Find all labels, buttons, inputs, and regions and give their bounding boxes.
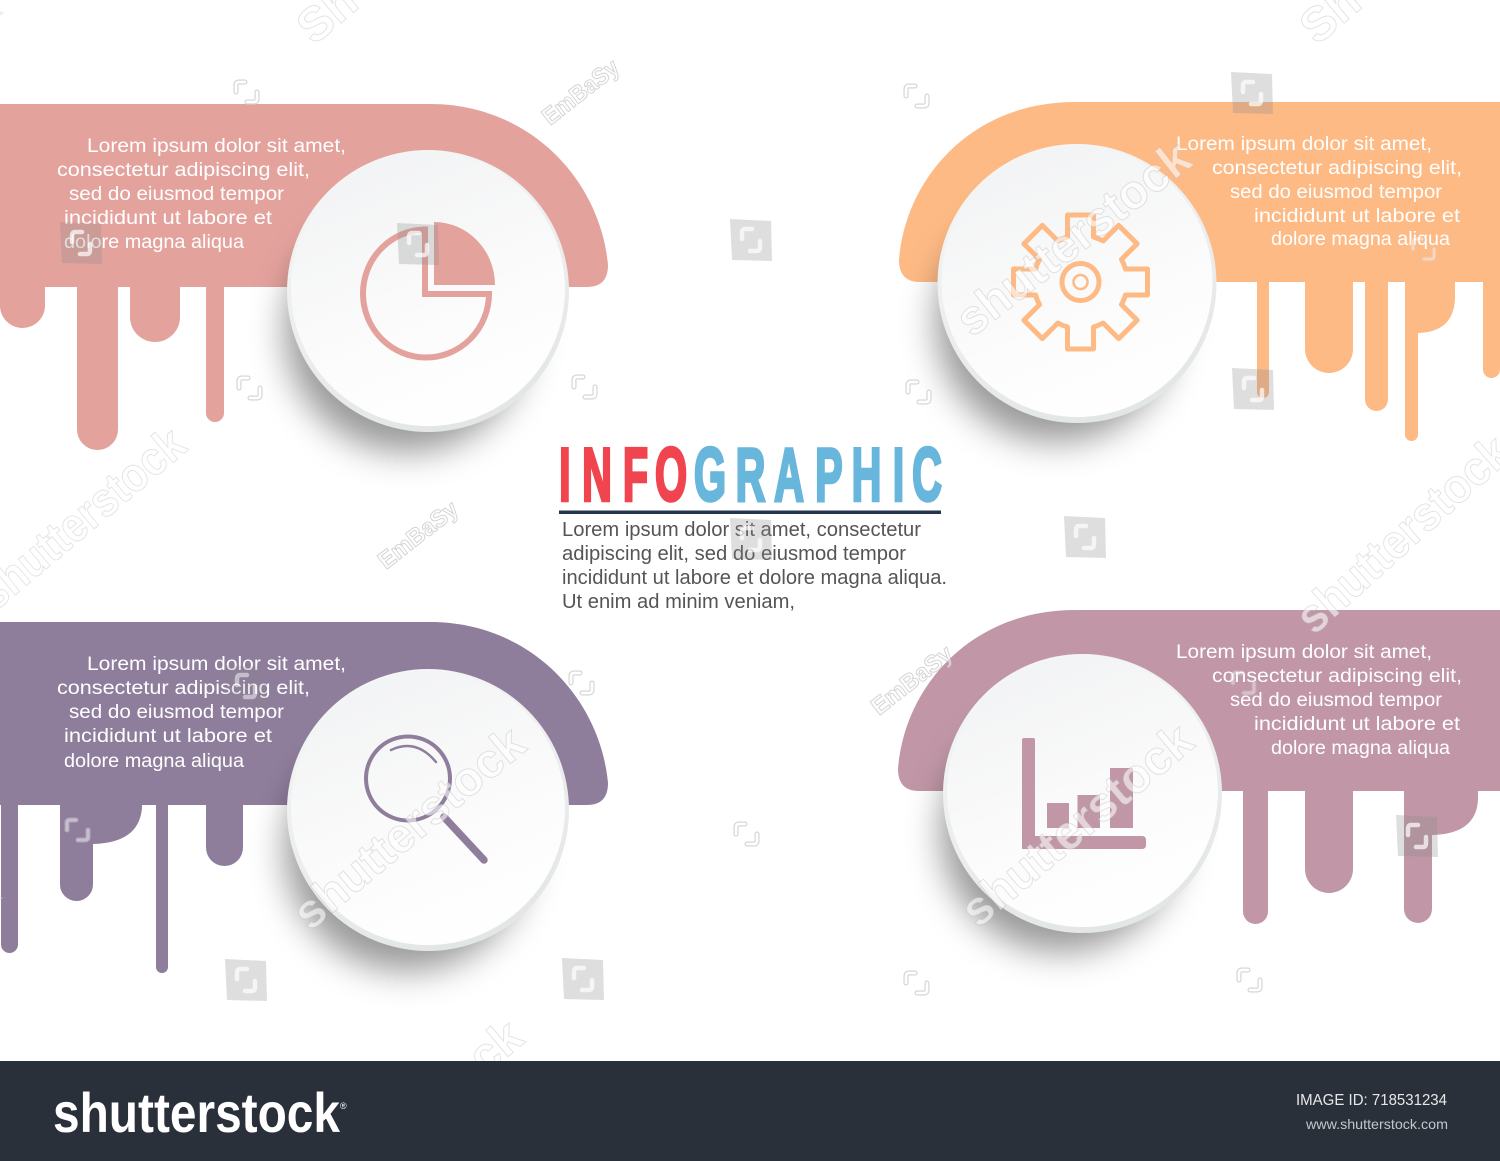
intro paragraph [562, 519, 947, 613]
orange circle badge [936, 144, 1216, 442]
purple panel text [57, 654, 346, 772]
watermarks: EmBaSy [373, 495, 464, 575]
website: www.shutterstock.com [1305, 1116, 1448, 1132]
watermarks: shutterstock [946, 131, 1201, 347]
heading: INFOGRAPHIC: I [559, 432, 571, 517]
purple circle badge [285, 669, 569, 971]
purple panel text: incididunt ut labore et [64, 726, 273, 747]
mauve panel text: dolore magna aliqua [1271, 738, 1450, 759]
watermarks: EmBaSy [537, 54, 625, 131]
footer logo: shutterstock [53, 1081, 341, 1144]
icon: bar chart [1022, 738, 1146, 849]
intro paragraph: incididunt ut labore et dolore magna aliqua. [562, 567, 947, 589]
title block [559, 432, 947, 613]
mauve panel text: sed do eiusmod tempor [1230, 690, 1443, 711]
purple panel text: Lorem ipsum dolor sit amet, [87, 654, 346, 675]
watermarks: shutterstock [951, 713, 1204, 937]
pink panel text: incididunt ut labore et [64, 208, 273, 229]
orange panel text [1176, 134, 1462, 250]
panel: bottom-right mauve [898, 610, 1500, 952]
watermarks: ck [458, 1009, 533, 1084]
orange panel text: sed do eiusmod tempor [1230, 182, 1443, 203]
orange band with drips [899, 102, 1500, 441]
heading: INFOGRAPHIC: P [815, 432, 843, 517]
image id: IMAGE ID: 718531234 [1296, 1092, 1447, 1109]
heading: INFOGRAPHIC: G [694, 432, 726, 517]
panel: top-left pink [0, 104, 608, 452]
pink panel text: dolore magna aliqua [64, 232, 244, 253]
pink panel text [57, 136, 346, 253]
pink band with drips [0, 104, 608, 450]
intro paragraph: Ut enim ad minim veniam, [562, 591, 795, 613]
orange panel text: dolore magna aliqua [1271, 229, 1450, 250]
intro paragraph: Lorem ipsum dolor sit amet, consectetur [562, 519, 921, 541]
mauve band with drips [898, 610, 1500, 924]
intro paragraph: adipiscing elit, sed do eiusmod tempor [562, 543, 906, 565]
heading: INFOGRAPHIC [559, 432, 942, 517]
purple panel text: consectetur adipiscing elit, [57, 678, 310, 699]
heading: INFOGRAPHIC: O [655, 432, 687, 517]
panel: bottom-left purple [0, 622, 608, 973]
mauve panel text: Lorem ipsum dolor sit amet, [1176, 642, 1432, 663]
watermarks: EmBaSy [866, 640, 959, 721]
heading: INFOGRAPHIC: H [852, 432, 881, 517]
purple panel text: sed do eiusmod tempor [69, 702, 285, 723]
heading: INFOGRAPHIC: C [912, 432, 942, 517]
purple panel text: dolore magna aliqua [64, 751, 244, 772]
watermarks: shutterstock [283, 716, 536, 940]
orange panel text: Lorem ipsum dolor sit amet, [1176, 134, 1432, 155]
heading: INFOGRAPHIC: F [623, 432, 648, 517]
panel: top-right orange [899, 102, 1500, 442]
heading: INFOGRAPHIC: R [736, 432, 765, 517]
mauve circle badge [941, 654, 1222, 952]
pink circle badge [285, 150, 569, 452]
orange panel text: incididunt ut labore et [1254, 206, 1461, 227]
footer bar [0, 1061, 1500, 1161]
heading: INFOGRAPHIC: A [774, 432, 804, 517]
mauve panel text: consectetur adipiscing elit, [1212, 666, 1462, 687]
icon: gear [1014, 215, 1148, 349]
pink panel text: consectetur adipiscing elit, [57, 160, 310, 181]
pink panel text: sed do eiusmod tempor [69, 184, 285, 205]
title underline [559, 510, 941, 514]
icon: magnifier [366, 736, 484, 860]
mauve panel text [1176, 642, 1462, 759]
icon: pie chart [363, 222, 495, 357]
pink panel text: Lorem ipsum dolor sit amet, [87, 136, 346, 157]
heading: INFOGRAPHIC: N [582, 432, 612, 517]
orange panel text: consectetur adipiscing elit, [1212, 158, 1462, 179]
heading: INFOGRAPHIC: I [893, 432, 904, 517]
purple band with drips [0, 622, 608, 973]
mauve panel text: incididunt ut labore et [1254, 714, 1461, 735]
registered mark: ® [340, 1101, 347, 1111]
